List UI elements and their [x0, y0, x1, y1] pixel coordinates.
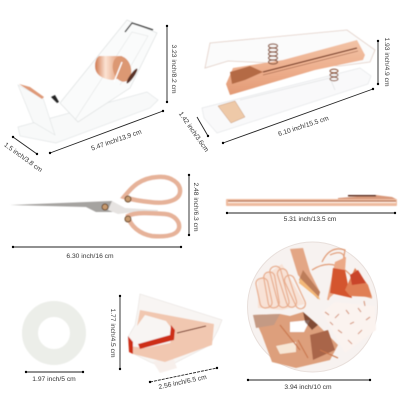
- remover rose body: [129, 310, 214, 362]
- dim: tape length: [49, 110, 164, 154]
- dim: pen length: 5.31 inch/13.5 cm: [284, 216, 337, 223]
- dispenser front support: [18, 85, 55, 135]
- dim: tape length: 5.47 inch/13.9 cm: [90, 129, 143, 152]
- stapler base: [202, 68, 371, 133]
- black clip: [51, 95, 59, 103]
- dispenser top cutter: [125, 23, 153, 32]
- dim: tray diameter: [247, 379, 371, 391]
- dim: tape width: 1.5 inch/3.8 cm: [2, 142, 44, 174]
- pen: [226, 195, 397, 206]
- tape dispenser: [18, 20, 158, 143]
- dim: remover length: [149, 367, 218, 391]
- dim: remover height: [109, 295, 121, 370]
- lower handle: [128, 213, 179, 236]
- dim: stapler height: 1.93 inch/4.9 cm: [383, 37, 390, 87]
- dim: tape height: 3.23 inch/8.2 cm: [170, 44, 177, 94]
- tray: [248, 242, 378, 372]
- remover tab: [153, 355, 177, 373]
- rose front tab: [19, 84, 44, 99]
- dispenser arm: [60, 20, 157, 122]
- dim: tape height: [166, 25, 177, 103]
- red inner jaw: [128, 325, 175, 354]
- left paper clips: [258, 264, 305, 310]
- remover clear cover: [128, 294, 222, 368]
- staple remover: [128, 294, 222, 373]
- dim: scissors height: [188, 174, 199, 236]
- dim: tape ring: [25, 371, 84, 383]
- blade: [10, 201, 118, 212]
- stapler rose body: [226, 40, 365, 95]
- stapler dark slot: [263, 48, 357, 72]
- stapler mottled front: [230, 66, 263, 84]
- stapler plate: [218, 101, 245, 123]
- pivots: [125, 196, 131, 202]
- dim: remover height: 1.77 inch/4.5 cm: [109, 308, 116, 358]
- tape ring: [30, 309, 78, 357]
- top clips: [290, 248, 320, 299]
- dim: stapler depth: 1.42 inch/3.6cm: [177, 111, 210, 154]
- dim: scissors height: 2.48 inch/6.3 cm: [192, 182, 199, 232]
- push pins: [322, 302, 376, 353]
- rose tape roll: [95, 56, 130, 80]
- dark line: [177, 326, 206, 333]
- stapler lid: [205, 30, 375, 68]
- dim: stapler length: [222, 88, 374, 144]
- stapler spring: [268, 44, 278, 64]
- dim: stapler height: [377, 37, 390, 87]
- dim: tape ring: 1.97 inch/5 cm: [32, 376, 76, 383]
- stapler lower spring: [330, 69, 338, 81]
- dim: remover length: 2.56 inch/6.5 cm: [158, 374, 208, 391]
- dispenser base: [18, 92, 158, 143]
- scissors: [10, 177, 180, 236]
- stapler: [202, 30, 375, 133]
- dim: tray diameter: 3.94 inch/10 cm: [284, 384, 332, 391]
- dim: scissors length: 6.30 inch/16 cm: [66, 253, 114, 260]
- binder clip tray: [248, 242, 378, 372]
- dim: stapler length: 6.10 inch/15.5 cm: [277, 115, 330, 138]
- upper handle: [124, 177, 180, 203]
- bottom clips: [253, 312, 338, 368]
